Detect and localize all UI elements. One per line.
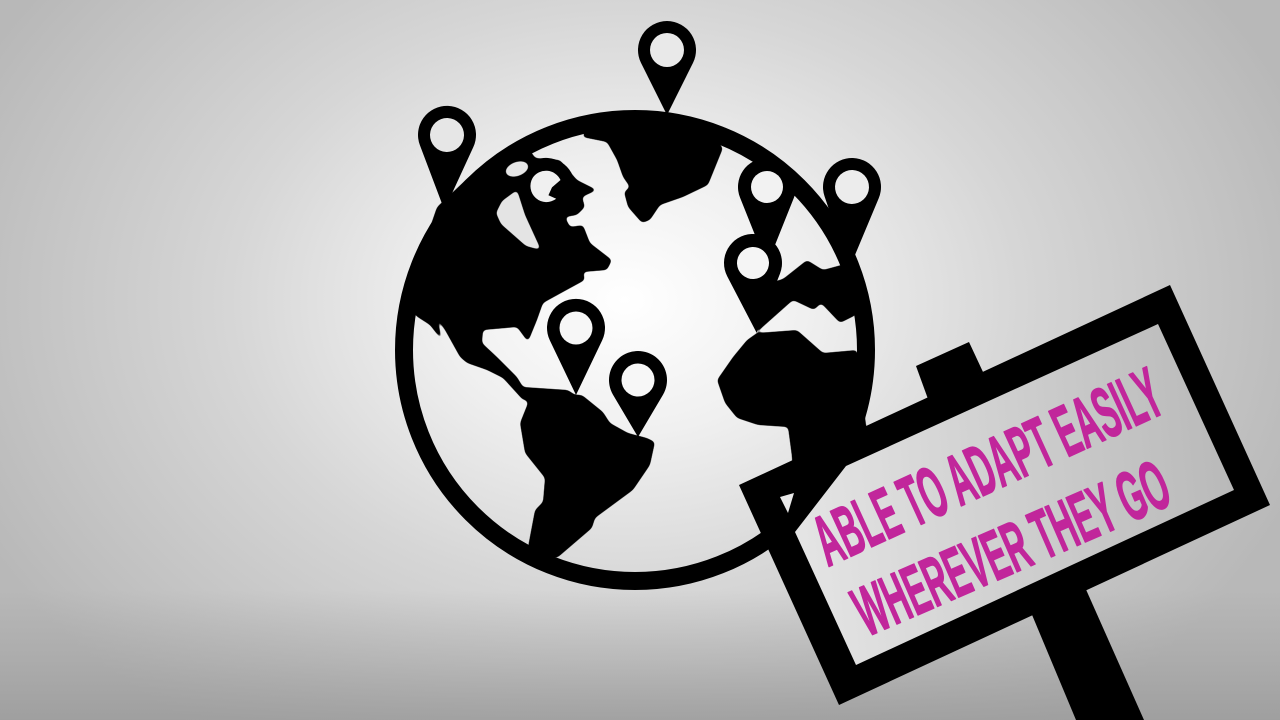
sign post xyxy=(1030,585,1144,720)
sign panel xyxy=(795,324,1234,665)
pin: europe xyxy=(738,158,796,265)
globe ring xyxy=(404,119,866,581)
gap between frame and globe xyxy=(780,493,794,513)
lake: arctic ellipse xyxy=(503,158,531,180)
continent: south america xyxy=(520,392,655,558)
sign top tab xyxy=(916,342,983,399)
pin: upper left xyxy=(415,105,477,211)
continent: eurasia xyxy=(745,260,862,332)
location pins xyxy=(415,21,882,437)
continent: north america xyxy=(405,150,612,400)
pin: south america xyxy=(609,351,667,437)
pin: central america xyxy=(547,299,605,395)
bay: hudson sliver xyxy=(496,190,541,250)
pin: mediterranean xyxy=(723,233,786,334)
africa overlap on frame xyxy=(780,440,860,520)
globe xyxy=(404,112,870,581)
pin: north america xyxy=(513,156,577,254)
continent: africa xyxy=(717,330,870,513)
sign xyxy=(739,285,1270,720)
sign frame xyxy=(739,285,1270,705)
pin: top xyxy=(638,21,696,115)
continent: arctic and greenland xyxy=(582,112,723,223)
continents xyxy=(405,112,870,558)
pin: upper right xyxy=(820,157,882,270)
north america lakes and bays xyxy=(496,158,541,250)
